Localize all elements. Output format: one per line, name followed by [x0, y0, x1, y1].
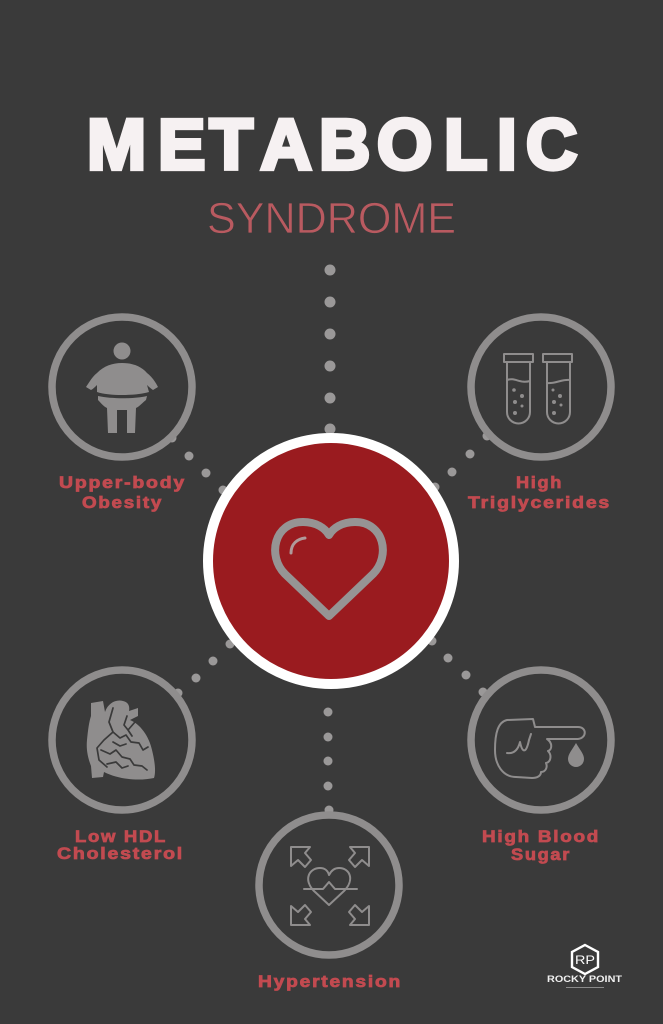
icon: blood drop — [568, 743, 584, 767]
panel: hypertension — [258, 815, 402, 991]
ring — [52, 317, 192, 457]
dotted connectors — [168, 264, 492, 814]
label — [57, 828, 184, 863]
panel: central heart — [208, 438, 454, 684]
icon: heart outline — [275, 522, 383, 616]
icon: finger prick — [495, 719, 585, 778]
ring — [52, 670, 192, 810]
label — [59, 474, 186, 512]
label: Sugar — [511, 846, 571, 864]
label: Cholesterol — [57, 845, 184, 863]
monogram: RP — [575, 953, 595, 967]
wordmark: ROCKY POINT — [547, 974, 623, 984]
ring — [259, 815, 399, 955]
tagline — [566, 987, 604, 988]
icon: bubbles — [512, 388, 562, 415]
label: Low HDL — [75, 828, 167, 846]
title: METABOLIC — [87, 106, 577, 185]
panel: low HDL cholesterol — [52, 670, 192, 863]
label: Upper-body — [59, 474, 186, 492]
icon: heart with expanding arrows — [291, 847, 369, 925]
subtitle: SYNDROME — [207, 194, 456, 243]
central red circle — [208, 438, 454, 684]
label — [468, 474, 611, 512]
label: Triglycerides — [468, 494, 611, 512]
label: High Blood — [482, 828, 600, 846]
icon: hexagon — [572, 945, 598, 974]
icon: obese figure — [86, 342, 158, 433]
label: Hypertension — [258, 973, 402, 991]
logo: Rocky Point — [547, 945, 623, 988]
label: High — [516, 474, 563, 492]
panel: upper-body obesity — [52, 317, 192, 512]
panel: high blood sugar — [471, 670, 611, 864]
ring — [471, 317, 611, 457]
ring — [471, 670, 611, 810]
panel: high triglycerides — [468, 317, 611, 512]
icon: anatomical heart — [87, 700, 155, 780]
label: Obesity — [82, 494, 163, 512]
label — [482, 828, 600, 864]
icon: test tubes — [504, 354, 572, 424]
